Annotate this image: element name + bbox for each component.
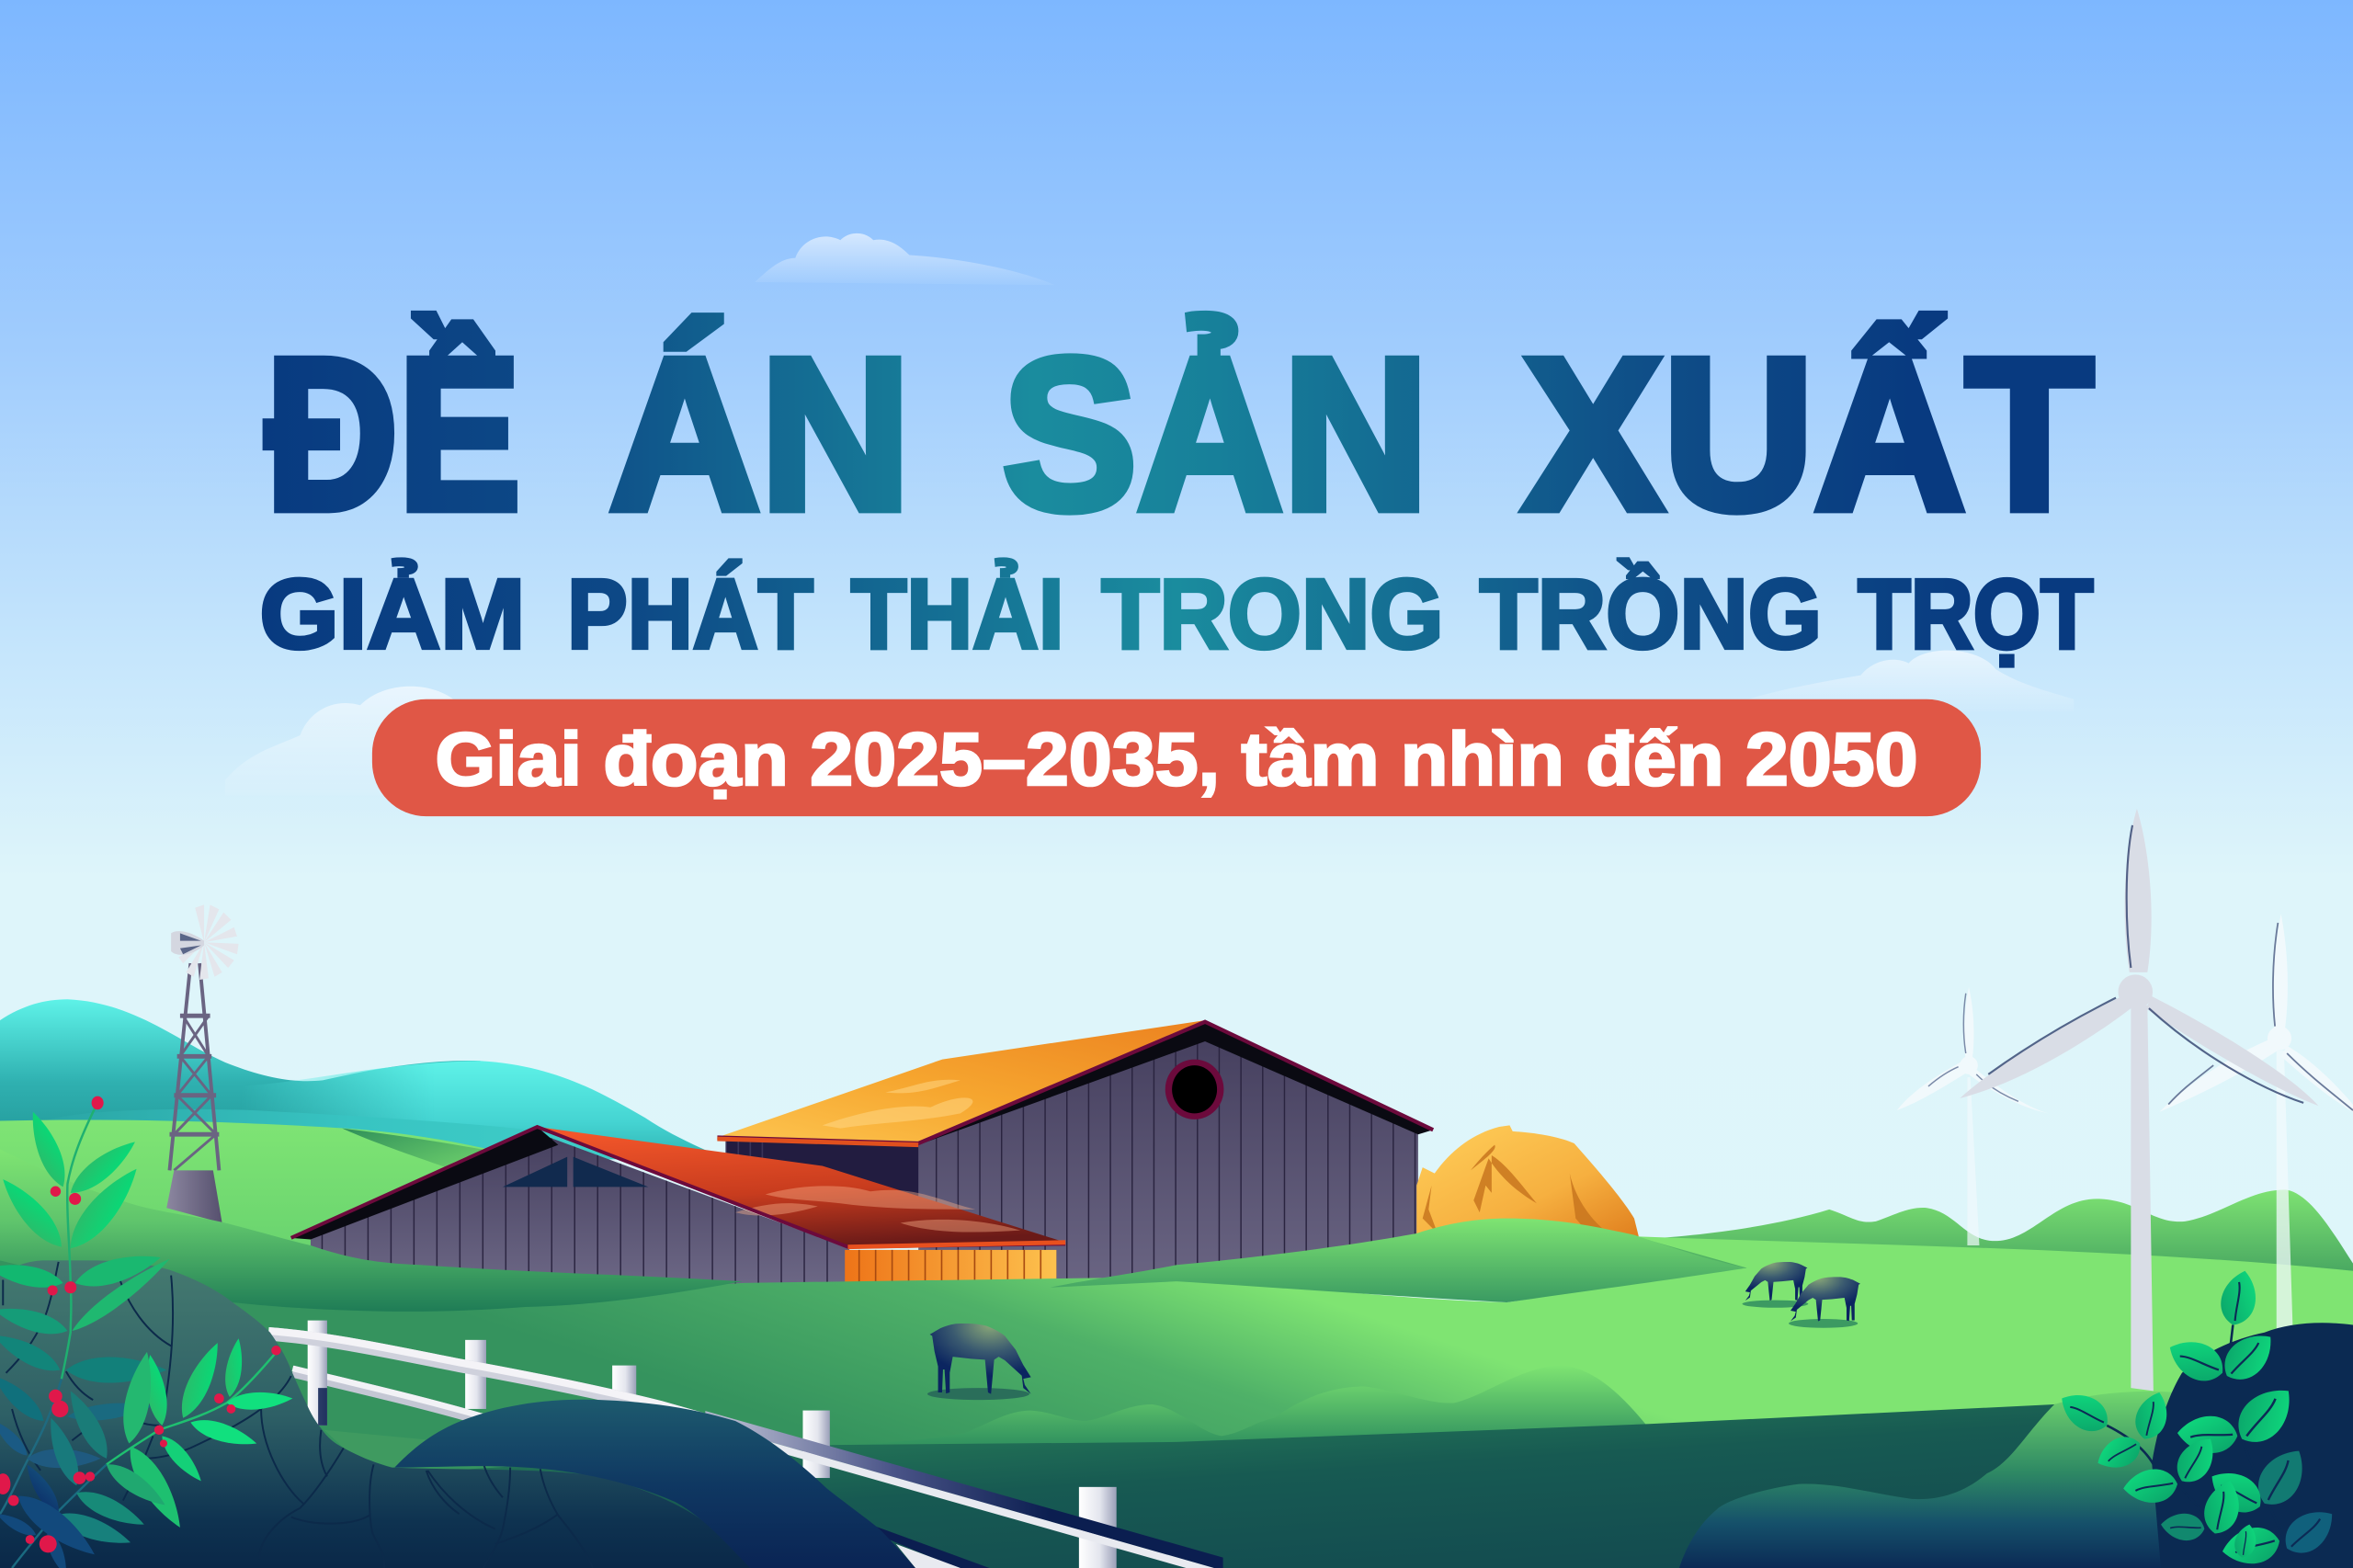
distant right hills [1636, 1190, 2353, 1321]
fence top rail dark edge [705, 1411, 1223, 1568]
hump field behind barn [1051, 1219, 1746, 1302]
title line 2: THẢI [851, 558, 1064, 669]
teal hills [0, 999, 706, 1160]
big barn dark side [726, 1139, 921, 1215]
plant stems [0, 1103, 278, 1568]
right plant leaves [2053, 1267, 2343, 1568]
haystack [1416, 1125, 1639, 1239]
windmill rotor [171, 904, 239, 980]
small right turbine [2159, 914, 2353, 1335]
fence post shadow [318, 1388, 327, 1426]
cow 2 [1789, 1277, 1860, 1328]
cloud: top [755, 233, 1055, 285]
big barn soffit [918, 1022, 1433, 1145]
big barn roof trim [717, 1022, 1433, 1143]
cloud: left behind pill [225, 687, 510, 795]
big barn roof [717, 1020, 1205, 1143]
windmill tower lattice [169, 963, 219, 1170]
right foreground wave [1679, 1392, 2353, 1568]
big barn round window [1165, 1060, 1223, 1119]
right dark bush [2152, 1323, 2353, 1568]
front barn gable window [503, 1157, 648, 1187]
left mid hill [0, 1150, 743, 1312]
dark lower field [450, 1398, 2353, 1568]
title line 2: PHÁT [567, 558, 813, 669]
title line 2 [259, 558, 2094, 669]
plant leaves [0, 1108, 293, 1568]
front barn [291, 1127, 1065, 1293]
title line 1: ĐỀ [266, 312, 521, 554]
subtitle pill [372, 699, 1981, 816]
title line 2: TRONG [1101, 558, 1444, 669]
title line 1 [266, 312, 2094, 554]
fence posts [308, 1321, 1117, 1568]
main green field [0, 1236, 2353, 1568]
dark arch hill [394, 1400, 915, 1568]
turbine blades [1960, 809, 2318, 1106]
fence lower-right rail [870, 1525, 994, 1568]
green patch beside bush [324, 1430, 435, 1468]
fence top rail, left [268, 1331, 766, 1437]
title line 1: ÁN [609, 312, 911, 554]
white fence [268, 1321, 1223, 1568]
front barn wall [311, 1133, 849, 1293]
leafy plant, right [2053, 1267, 2343, 1568]
subtitle pill: Giai đoạn 2025–2035, tầm nhìn đến 2050 [435, 718, 1918, 801]
windmill base [166, 1170, 222, 1223]
plant berries [0, 1096, 281, 1552]
big wind turbine [1960, 809, 2318, 1391]
right plant stems [2107, 1325, 2296, 1568]
fence lower-left rail [292, 1369, 503, 1426]
title line 2: TRỒNG [1480, 558, 1822, 669]
small left turbine [1897, 987, 2049, 1245]
fence top rail, white face [705, 1424, 1223, 1568]
big barn roof streaks [823, 1080, 972, 1129]
grazing cow [927, 1324, 1031, 1400]
bush branch lines [3, 1262, 593, 1568]
grazing cows, right [1743, 1262, 1860, 1328]
cow 1 [1743, 1262, 1808, 1308]
coffee plant, left [0, 1096, 293, 1568]
windmill [166, 904, 239, 1223]
front barn roof trim [291, 1127, 1065, 1247]
title line 2: TRỌT [1858, 558, 2094, 669]
lower wave hills [835, 1366, 1649, 1459]
title line 2: GIẢM [259, 558, 525, 669]
turbine blade shading [1988, 825, 2303, 1103]
turbine tower [2131, 1006, 2154, 1391]
front barn orange slats [845, 1250, 1056, 1289]
title line 1: SẢN [1003, 312, 1428, 554]
front barn soffit [291, 1127, 558, 1239]
cloud: right behind title [1748, 651, 2074, 711]
front barn roof [537, 1127, 1065, 1247]
big barn [717, 1020, 1433, 1312]
title line 1: XUẤT [1523, 312, 2094, 554]
big barn wall [918, 1032, 1418, 1312]
left dark bush [0, 1260, 750, 1568]
back green field [0, 1119, 750, 1321]
front barn roof streaks [735, 1186, 1020, 1233]
